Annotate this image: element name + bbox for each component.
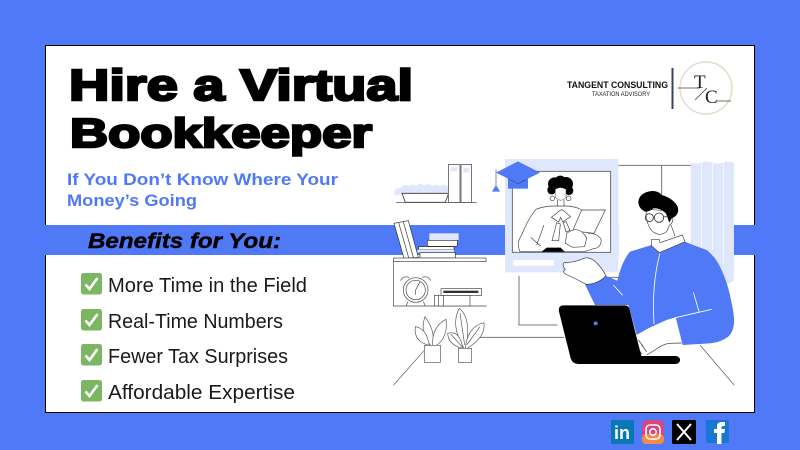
subtitle: If You Don’t Know Where Your <box>67 170 338 189</box>
logo: Tangent Consulting: T <box>694 72 706 93</box>
item: real-time numbers: Real-Time Numbers <box>108 311 283 333</box>
icon: X <box>672 420 696 444</box>
video call window <box>505 159 618 272</box>
subtitle <box>67 170 338 210</box>
panel: white card <box>46 46 754 412</box>
title: Hire a Virtual <box>69 61 413 110</box>
icon: facebook <box>706 420 729 444</box>
title <box>69 61 413 156</box>
woman's hair <box>547 176 573 195</box>
logo: Tangent Consulting: TAXATION ADVISORY <box>592 91 651 98</box>
social icons <box>611 420 729 444</box>
title: Bookkeeper <box>70 110 372 156</box>
item: fewer tax surprises: Fewer Tax Surprises <box>108 346 288 368</box>
icon: instagram <box>642 420 664 444</box>
hair <box>638 191 678 223</box>
logo: Tangent Consulting: TANGENT CONSULTING <box>567 80 668 91</box>
wall behind man <box>618 217 692 260</box>
woman presenter <box>518 176 605 252</box>
man's raised hand <box>563 258 606 284</box>
icon: linkedin: in <box>614 423 630 443</box>
heading: benefits: Benefits for You: <box>88 230 281 253</box>
window frame and room lines <box>393 165 734 385</box>
neck <box>652 225 685 253</box>
laptop <box>559 305 680 364</box>
logo: Tangent Consulting <box>567 62 732 114</box>
band: benefits strip <box>44 225 756 255</box>
curtain <box>691 162 734 283</box>
upper shelf with tray and books <box>394 165 477 202</box>
graduation cap <box>492 161 540 192</box>
man in blue sweater <box>563 191 734 355</box>
item: more time: More Time in the Field <box>108 275 307 297</box>
lower shelf with clock and books <box>393 258 487 306</box>
logo: Tangent Consulting: C <box>705 87 718 108</box>
collar <box>652 235 685 253</box>
subtitle: Money’s Going <box>67 191 197 210</box>
illustration: virtual bookkeeper at laptop <box>393 159 734 385</box>
item: affordable expertise: Affordable Expertise <box>108 382 295 404</box>
man's typing hand <box>637 317 682 355</box>
head <box>646 209 673 234</box>
leaning books and stack <box>394 221 459 258</box>
benefits list <box>81 273 307 404</box>
glasses <box>645 213 670 222</box>
potted plants <box>415 308 484 362</box>
